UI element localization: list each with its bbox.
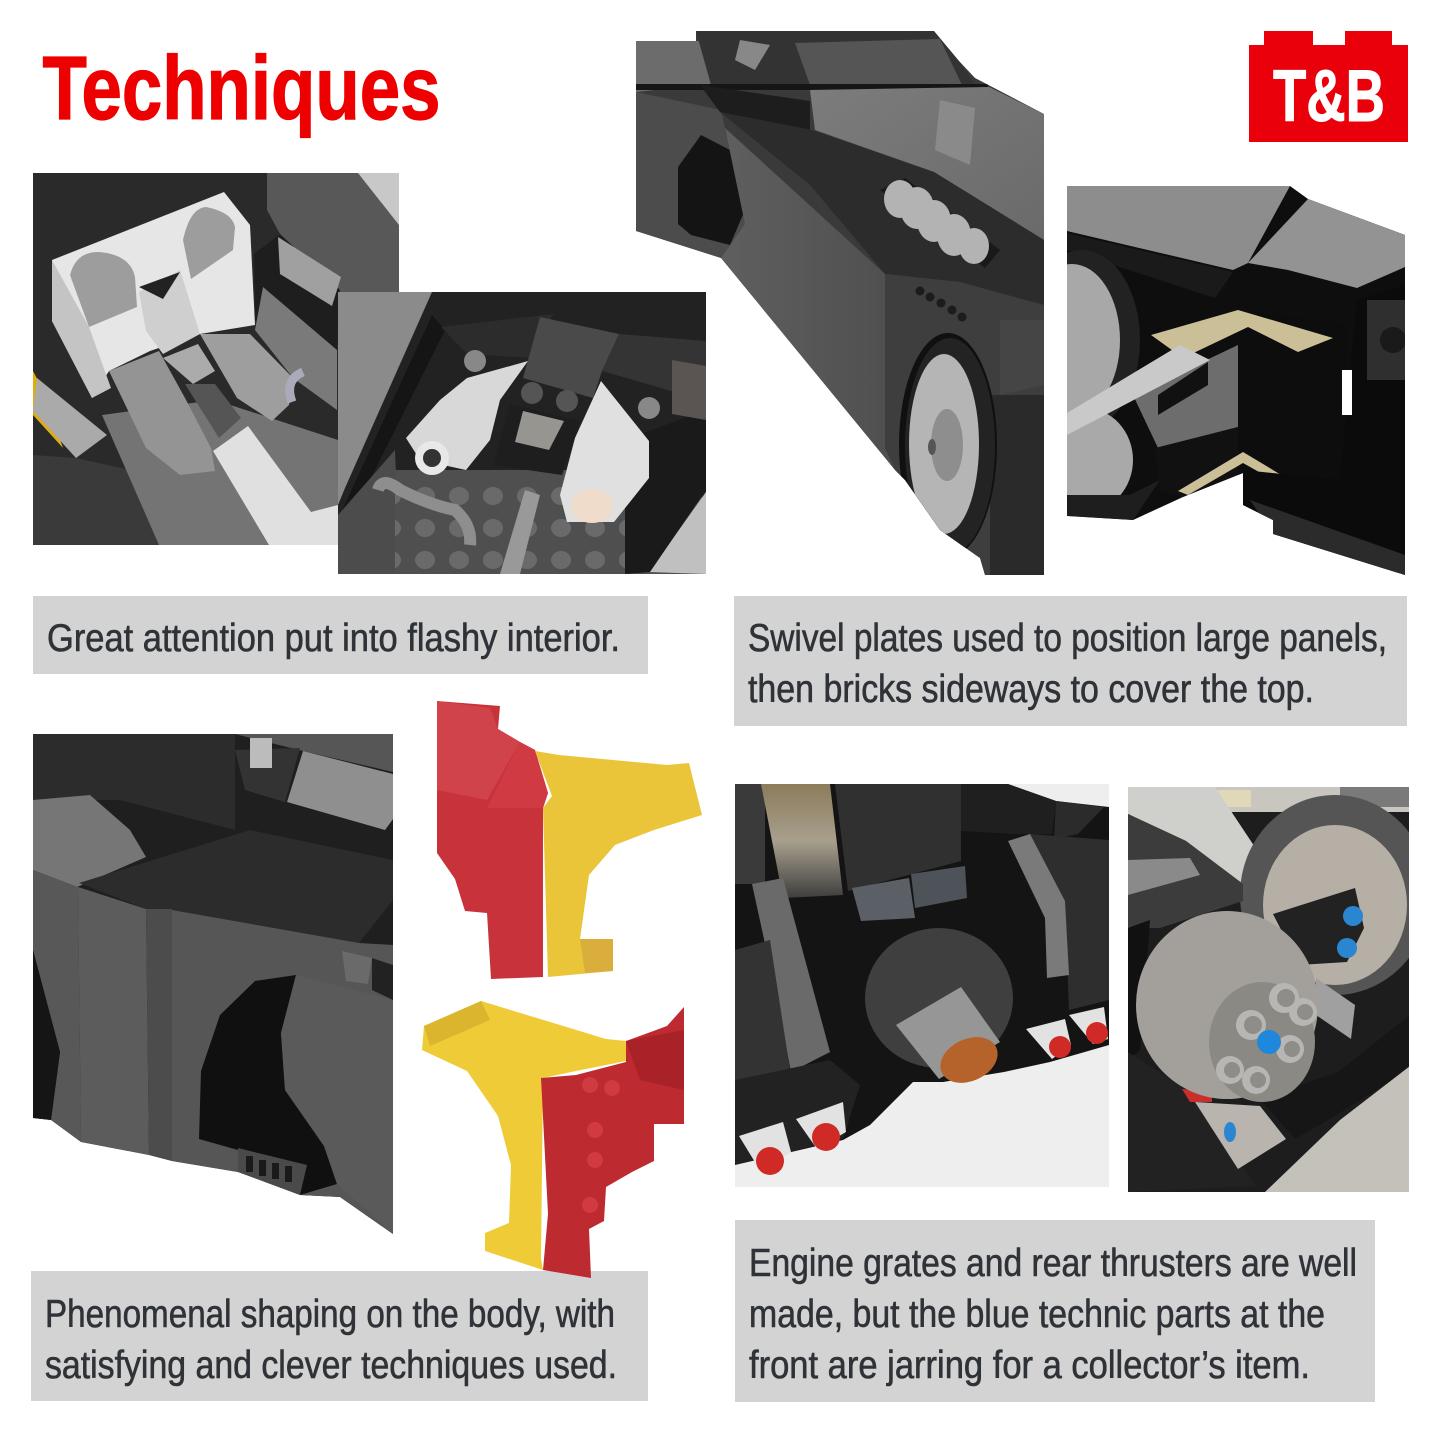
caption panel: body shaping: Phenomenal shaping on the body, with bbox=[45, 1293, 615, 1336]
caption panel: body shaping bbox=[31, 1271, 648, 1401]
caption panel: interior bbox=[33, 596, 648, 674]
caption panel: swivel plates bbox=[734, 596, 1407, 726]
title: Techniques bbox=[42, 39, 440, 139]
logo: T&B brick bbox=[1249, 31, 1408, 142]
photo: dashboard and controls bbox=[338, 292, 706, 574]
photo: car side with panels bbox=[636, 30, 1044, 576]
photo: swivel plate mechanism bbox=[1067, 186, 1405, 575]
photo: rear thruster bbox=[735, 784, 1109, 1187]
caption panel: engine grates: Engine grates and rear thrusters are well bbox=[749, 1242, 1357, 1285]
photo: body shaping closeup bbox=[33, 734, 393, 1235]
brick model: red and yellow arch, exterior bbox=[437, 701, 702, 979]
photo: cockpit seats bbox=[33, 173, 399, 545]
caption panel: engine grates bbox=[735, 1220, 1375, 1402]
caption panel: interior: Great attention put into flashy interior. bbox=[47, 617, 620, 660]
caption panel: swivel plates: then bricks sideways to cover the top. bbox=[748, 668, 1314, 711]
caption panel: engine grates: front are jarring for a collector’s item. bbox=[749, 1344, 1310, 1387]
brick model: red and yellow arch, interior bbox=[422, 1001, 684, 1278]
caption panel: engine grates: made, but the blue technic parts at the bbox=[749, 1293, 1325, 1336]
caption panel: body shaping: satisfying and clever techniques used. bbox=[45, 1344, 617, 1387]
logo: T&B brick: T&B bbox=[1273, 56, 1385, 137]
photo: front technic parts bbox=[1128, 787, 1430, 1192]
